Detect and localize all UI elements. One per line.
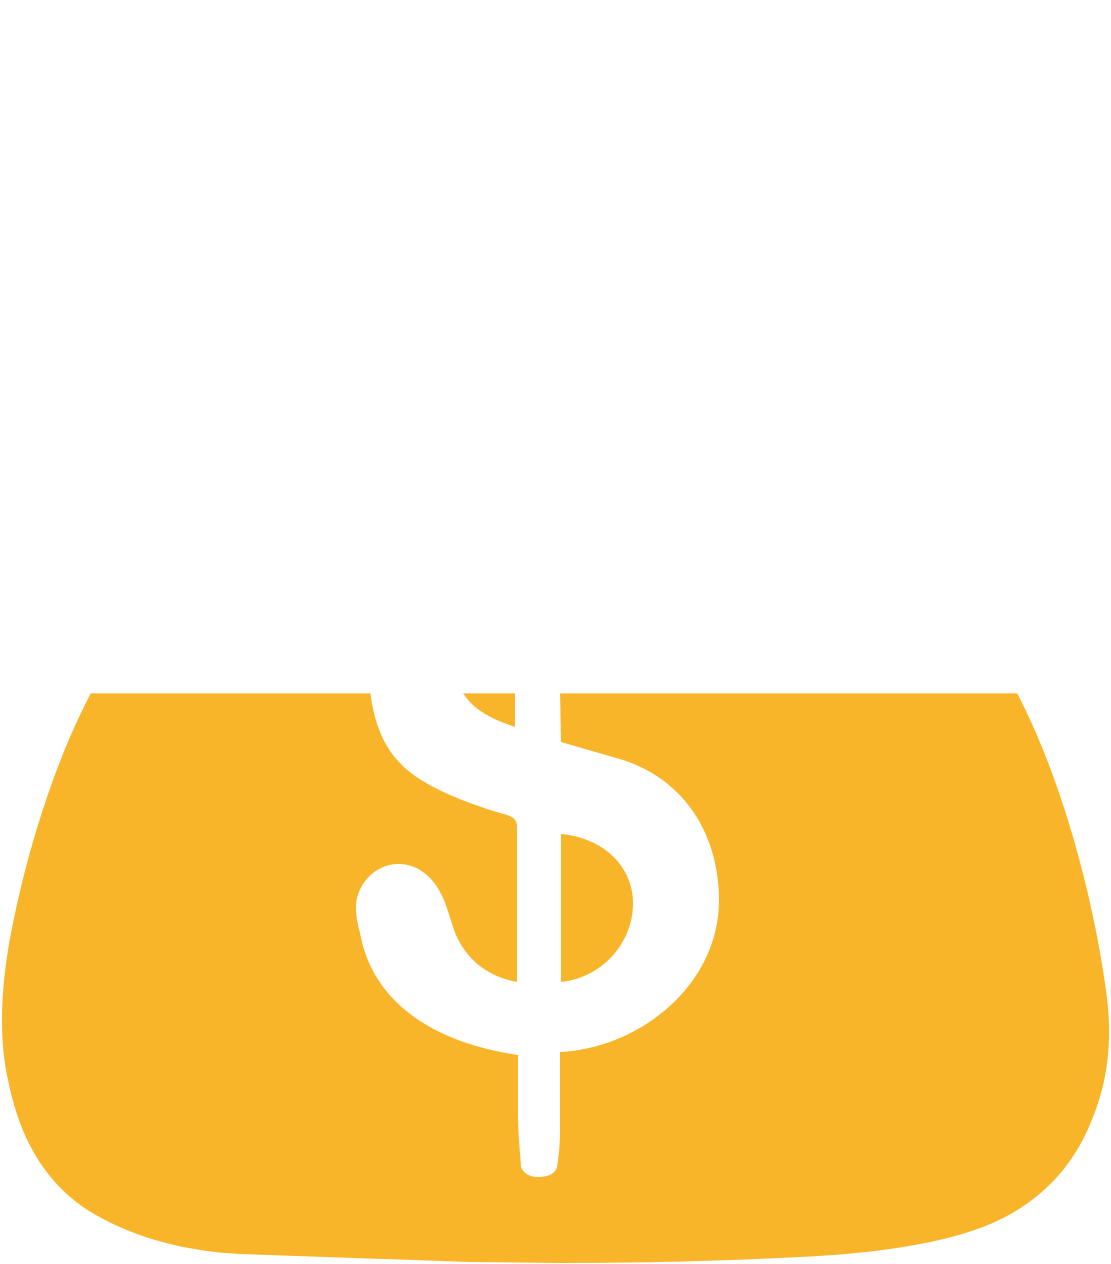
dollar counter: right <box>561 834 633 982</box>
money bag body <box>2 693 1109 1263</box>
dollar counter: top <box>463 693 515 727</box>
dollar sign <box>356 690 719 1177</box>
